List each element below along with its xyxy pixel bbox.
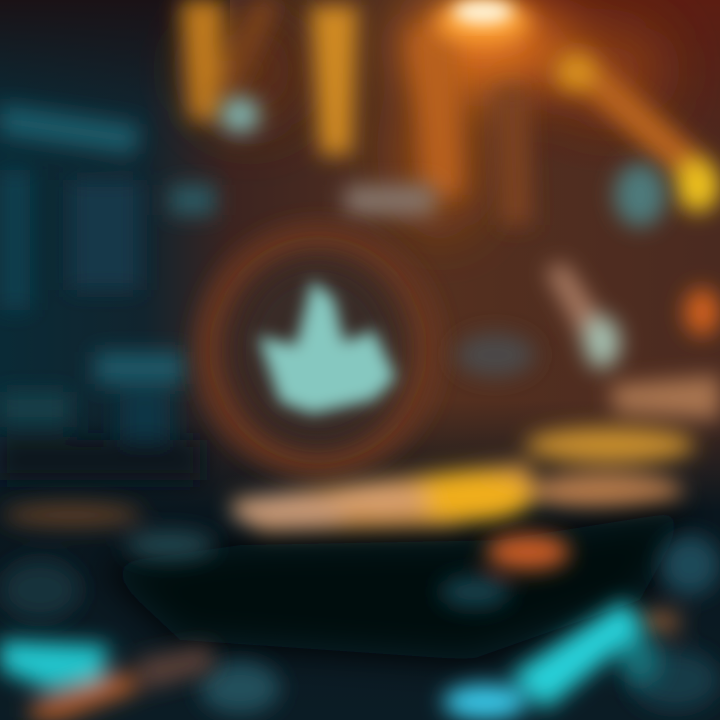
icon: teal leaf symbol [258,280,396,414]
base: dark platform [100,510,690,660]
coins: gold stack [230,375,720,535]
streaks: cyan and orange floor lights [0,600,660,720]
emblem: brown circular ring [210,238,426,462]
machine: teal left panels [0,97,666,480]
light: bright sun [435,0,531,44]
beams: vertical orange supports [180,0,532,225]
beam: diagonal orange arm [555,50,720,212]
highlight: pale diagonal streak [455,262,720,377]
details: lower highlights [0,503,720,714]
glow: orange light at top [190,0,665,230]
